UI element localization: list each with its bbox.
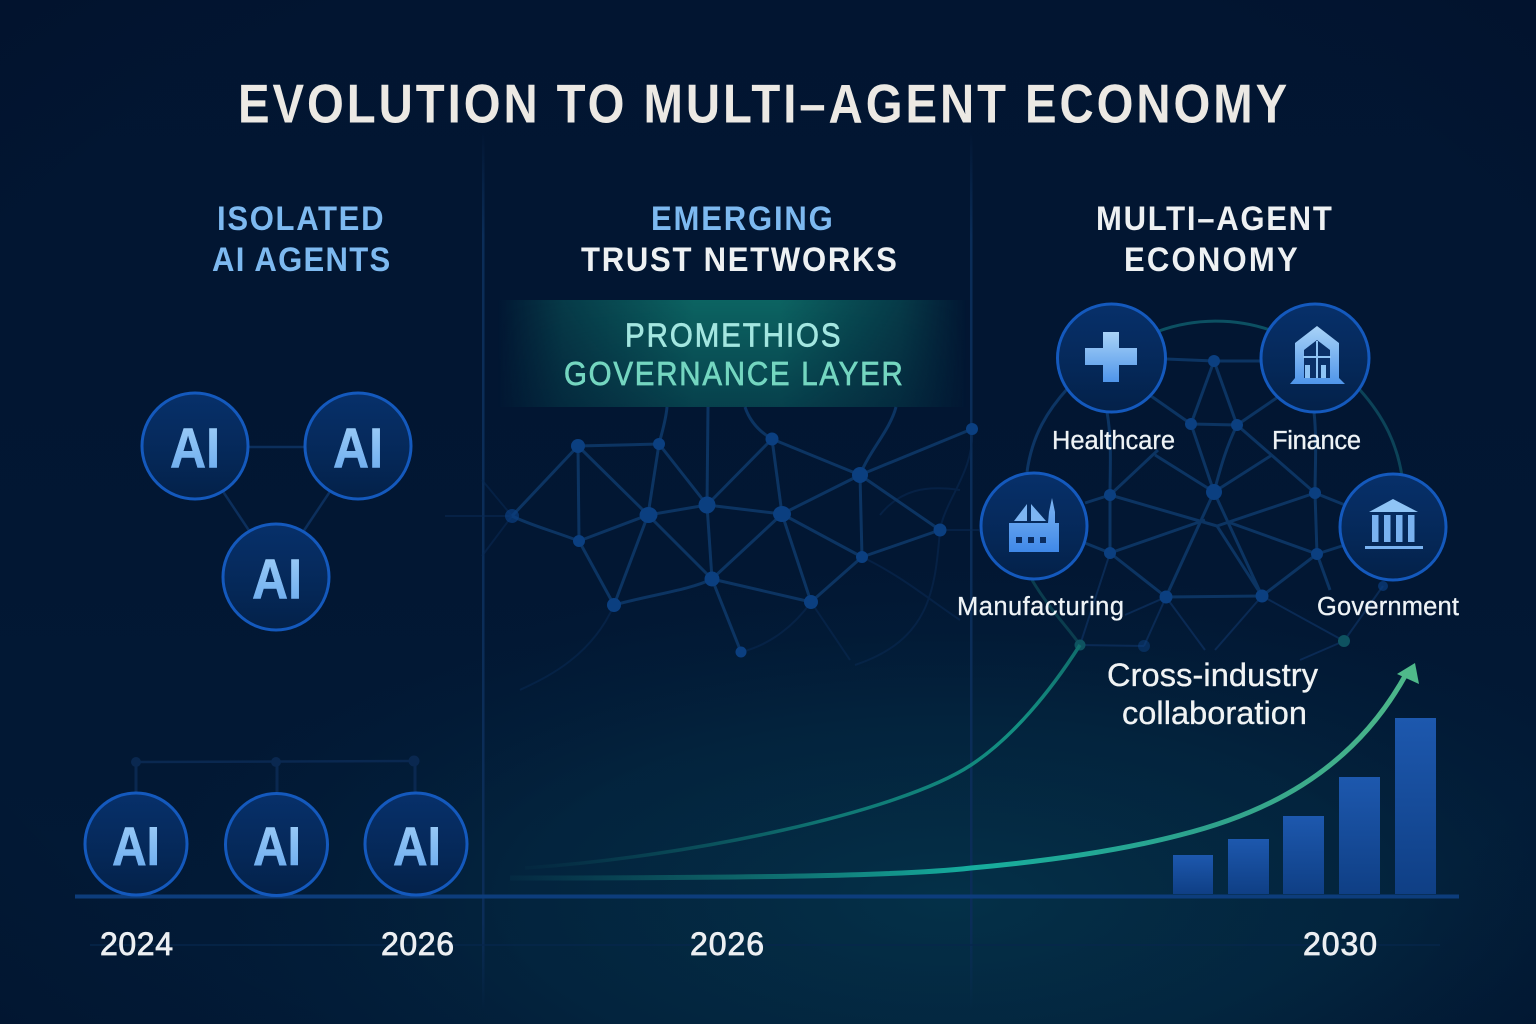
icon: AI agent lower: AI [252,548,302,612]
faint lower network edges [1080,553,1383,660]
year labels: 2026 [690,926,764,962]
icon: manufacturing [981,473,1087,579]
outer arc [1027,321,1402,645]
year labels: 2030 [1303,926,1377,962]
icon: AI agent timeline 3: AI [393,815,441,877]
heading: isolated AI agents: AI AGENTS [212,239,390,278]
icon: AI agent upper right: AI [333,416,383,480]
connections between upper AI agents [222,447,331,532]
panel: Promethios governance layer [497,300,967,407]
panel: isolated AI agents [142,198,411,630]
arrow: main growth curve [510,663,1419,878]
callout: cross-industry collaboration [1107,657,1319,731]
callout: cross-industry collaboration: Cross-industry [1107,657,1319,693]
heading: multi-agent economy: MULTI–AGENT [1096,198,1332,237]
panel: Promethios governance layer: PROMETHIOS [625,316,841,354]
heading: multi-agent economy: ECONOMY [1124,239,1298,278]
icon: AI agent upper right [305,393,411,499]
year labels: 2026 [381,926,454,962]
year labels [100,926,1377,962]
timeline axis [75,894,1459,898]
icon: finance [1261,304,1369,412]
icon: government [1340,474,1446,580]
callout: cross-industry collaboration: collaboration [1122,695,1307,731]
faint background curves [445,429,979,690]
year labels: 2024 [100,926,173,962]
icon: AI agent timeline 1: AI [112,815,160,877]
label: government: Government [1317,593,1459,621]
network nodes [505,423,978,658]
heading: emerging trust networks: TRUST NETWORKS [581,239,897,278]
icon: AI agent upper left [142,393,248,499]
heading: emerging trust networks: EMERGING [651,198,833,237]
label: finance: Finance [1272,427,1361,455]
panel: Promethios governance layer: GOVERNANCE LAYER [564,354,903,392]
heading: multi-agent economy [1096,198,1332,278]
network: multi-agent economy [1027,321,1402,660]
icon: healthcare [1058,304,1166,412]
teal nodes [1074,635,1350,650]
icon: AI agent upper left: AI [170,416,220,480]
network edges [1085,359,1345,597]
bar chart [1173,718,1436,894]
label: healthcare: Healthcare [1052,427,1175,455]
icon: AI agent timeline 3 [365,793,467,895]
icon: AI agent timeline 2: AI [253,815,301,877]
icon: AI agent lower [223,524,329,630]
heading: isolated AI agents [212,198,390,278]
icon: AI agent timeline 2 [226,794,328,896]
label: manufacturing: Manufacturing [957,593,1124,621]
icon: AI agent timeline 1 [85,793,187,895]
network nodes [1104,355,1388,652]
network: emerging trust network [445,407,979,690]
heading: isolated AI agents: ISOLATED [217,198,384,237]
network edges [512,407,972,652]
heading: emerging trust networks [581,198,897,278]
faint connector tree above bottom AI agents [131,756,420,793]
arrow: secondary growth curve [525,645,1080,868]
title: EVOLUTION TO MULTI–AGENT ECONOMY [238,73,1287,134]
